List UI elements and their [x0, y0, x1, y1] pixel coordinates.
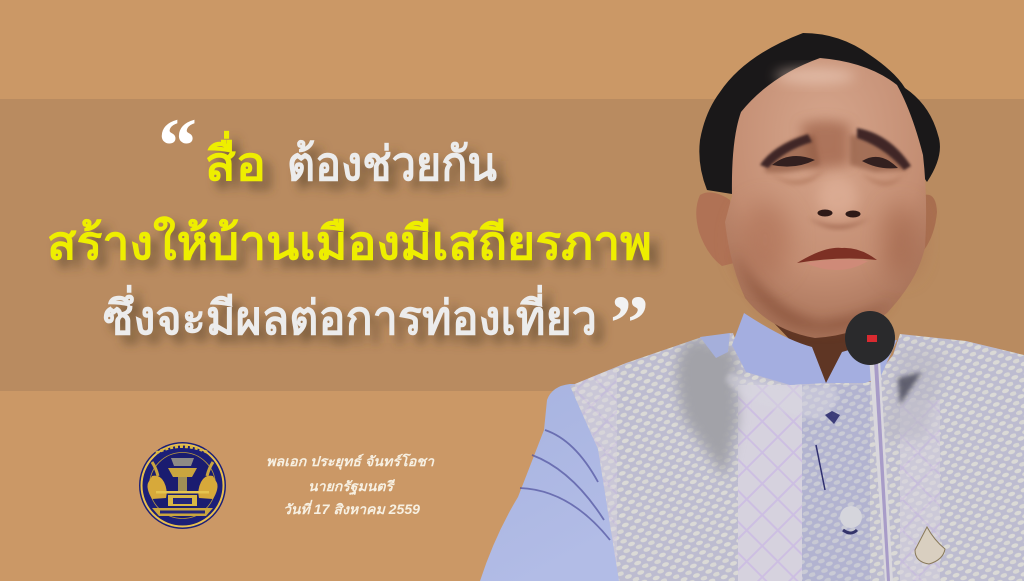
line three: ซึ่งจะมีผลต่อการท่องเที่ยว [103, 284, 597, 344]
date: วันที่ 17 สิงหาคม 2559 [283, 499, 421, 517]
closing quote mark: ” [610, 279, 649, 366]
name: พลเอก ประยุทธ์ จันทร์โอชา [266, 453, 435, 470]
face features [735, 68, 918, 331]
emblem [139, 442, 226, 529]
hair [699, 33, 940, 194]
title: นายกรัฐมนตรี [308, 479, 396, 496]
vest [560, 325, 1024, 581]
text shadow [55, 138, 660, 352]
headline word: media: สื่อ [205, 130, 266, 190]
portrait [480, 33, 1024, 581]
text shadow: ต้องช่วยกัน [295, 145, 505, 198]
text shadow: สื่อ [213, 138, 274, 198]
mic head [845, 311, 895, 365]
quote text [47, 102, 660, 366]
left ear [696, 192, 738, 266]
jacket [480, 325, 1024, 581]
text shadow: สร้างให้บ้านเมืองมีเสถียรภาพ [55, 223, 660, 277]
face [725, 58, 926, 338]
right ear [924, 195, 937, 250]
text shadow: ซึ่งจะมีผลต่อการท่องเที่ยว [111, 292, 605, 352]
line two: สร้างให้บ้านเมืองมีเสถียรภาพ [47, 215, 652, 269]
opening quote mark: “ [158, 102, 197, 189]
quote band [0, 99, 1024, 391]
attribution [266, 453, 435, 517]
eyes [772, 156, 815, 167]
lapel pin [915, 527, 945, 564]
collar [732, 313, 826, 385]
nose [818, 177, 858, 217]
neck [752, 300, 885, 383]
sleeve [480, 384, 625, 581]
mic stem [868, 342, 893, 581]
microphone [845, 311, 895, 581]
line one: ต้องช่วยกัน [287, 137, 497, 190]
eyebrows [760, 134, 812, 168]
mouth [797, 248, 877, 263]
shoulder tip [700, 333, 730, 358]
